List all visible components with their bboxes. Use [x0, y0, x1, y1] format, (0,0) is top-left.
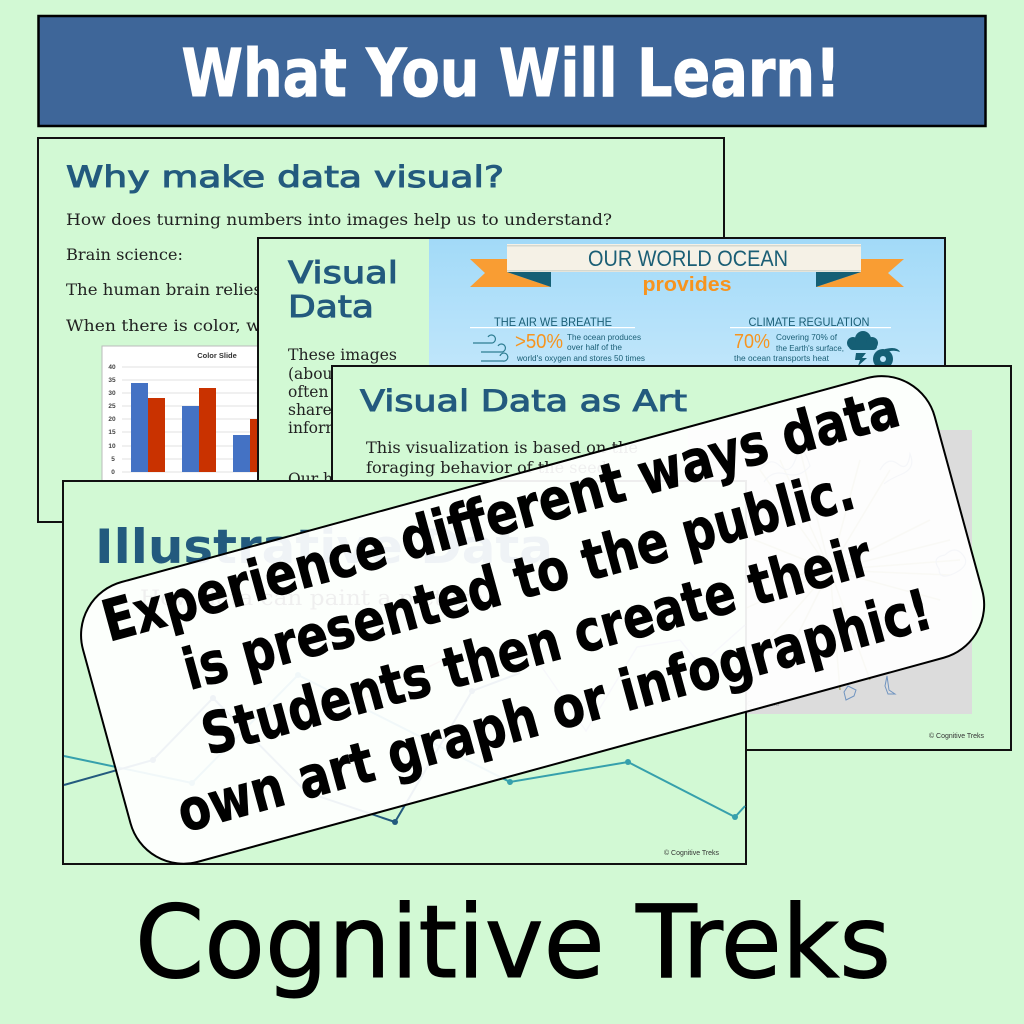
bar chart: color slide — [102, 346, 272, 486]
panel: visual data — [258, 238, 945, 508]
infographic: our world ocean: 70% — [734, 331, 770, 353]
text block: slide body: How does turning numbers into images help us to understand? — [66, 210, 612, 229]
heading: visual data as art: Visual Data as Art — [360, 384, 687, 418]
icon: wind — [473, 335, 508, 361]
infographic: our world ocean: provides — [642, 274, 732, 296]
bar chart: color slide: 25 — [108, 403, 116, 410]
bar chart: color slide: 40 — [108, 364, 116, 371]
infographic: our world ocean: the ocean transports heat — [734, 353, 830, 363]
text block: visual data body: share — [288, 401, 332, 419]
image: ant foraging art — [688, 430, 972, 714]
text block: visual data body: Our h — [288, 470, 333, 488]
image: ant foraging art: Greenfield — [747, 701, 779, 708]
text block: slide body — [66, 210, 612, 335]
callout text — [95, 374, 960, 852]
infographic: our world ocean: Covering 70% of — [776, 332, 838, 342]
title banner: What You Will Learn! — [182, 35, 840, 112]
text block: visual data body: These images — [288, 346, 397, 364]
text block: visual data body: (about — [288, 365, 340, 383]
copyright: illustrative slide: © Cognitive Treks — [664, 849, 719, 857]
infographic: our world ocean: CLIMATE REGULATION — [748, 315, 870, 329]
infographic: our world ocean — [429, 239, 944, 369]
text block: visual data body — [288, 346, 397, 488]
callout: rotated summary card — [68, 364, 997, 876]
callout text: is presented to the public. — [176, 457, 862, 704]
bar chart: color slide: 0 — [111, 469, 115, 476]
text block: slide body: The human brain relies — [66, 280, 262, 299]
infographic: our world ocean: >50% — [515, 331, 563, 353]
heading: illustrative data: Illustrative Data — [95, 520, 553, 575]
panel: illustrative data — [63, 481, 746, 864]
heading: why make data visual: Why make data visual? — [66, 160, 504, 194]
bar chart: color slide: 20 — [108, 416, 116, 423]
heading: visual data — [288, 256, 398, 325]
bar chart: color slide: 10 — [108, 443, 116, 450]
infographic: our world ocean: The ocean produces — [567, 332, 641, 342]
bar chart: color slide: 30 — [108, 390, 116, 397]
heading: visual data: Data — [288, 290, 374, 325]
panel: why make data visual — [38, 138, 724, 522]
callout text: Students then create their — [195, 523, 879, 769]
text block: art body: foraging behavior of the seed — [366, 459, 607, 477]
text block: art body: harvester ants — [366, 479, 480, 497]
line chart — [64, 625, 745, 825]
footer brand: cognitive treks: Cognitive Treks — [135, 883, 891, 1001]
text block: art body: This visualization is based on the — [366, 439, 638, 457]
infographic: our world ocean: THE AIR WE BREATHE — [494, 315, 612, 329]
infographic: our world ocean: OUR WORLD OCEAN — [588, 246, 788, 271]
text block: visual data body: inform — [288, 419, 340, 437]
title banner — [38, 16, 986, 126]
bar chart: color slide: 15 — [108, 429, 116, 436]
copyright: art slide: © Cognitive Treks — [929, 732, 984, 740]
text block: art body — [366, 439, 638, 497]
heading: visual data: Visual — [288, 256, 398, 291]
text block: visual data body: often — [288, 383, 328, 401]
infographic: our world ocean: world's oxygen and stores 50 times — [516, 353, 645, 363]
bar chart: color slide: 35 — [108, 377, 116, 384]
infographic: our world ocean: the Earth's surface, — [776, 343, 844, 353]
text block: slide body: Brain science: — [66, 245, 183, 264]
icon: storm cloud and hurricane — [847, 331, 900, 369]
bar chart: color slide: Color Slide — [197, 351, 237, 360]
infographic: our world ocean: over half of the — [567, 342, 622, 352]
panel: visual data as art — [332, 366, 1011, 750]
text block: illustrative subtitle: How data can paint a picture — [140, 586, 483, 610]
bar chart: color slide: 5 — [111, 456, 115, 463]
text block: slide body: When there is color, we — [66, 316, 271, 335]
